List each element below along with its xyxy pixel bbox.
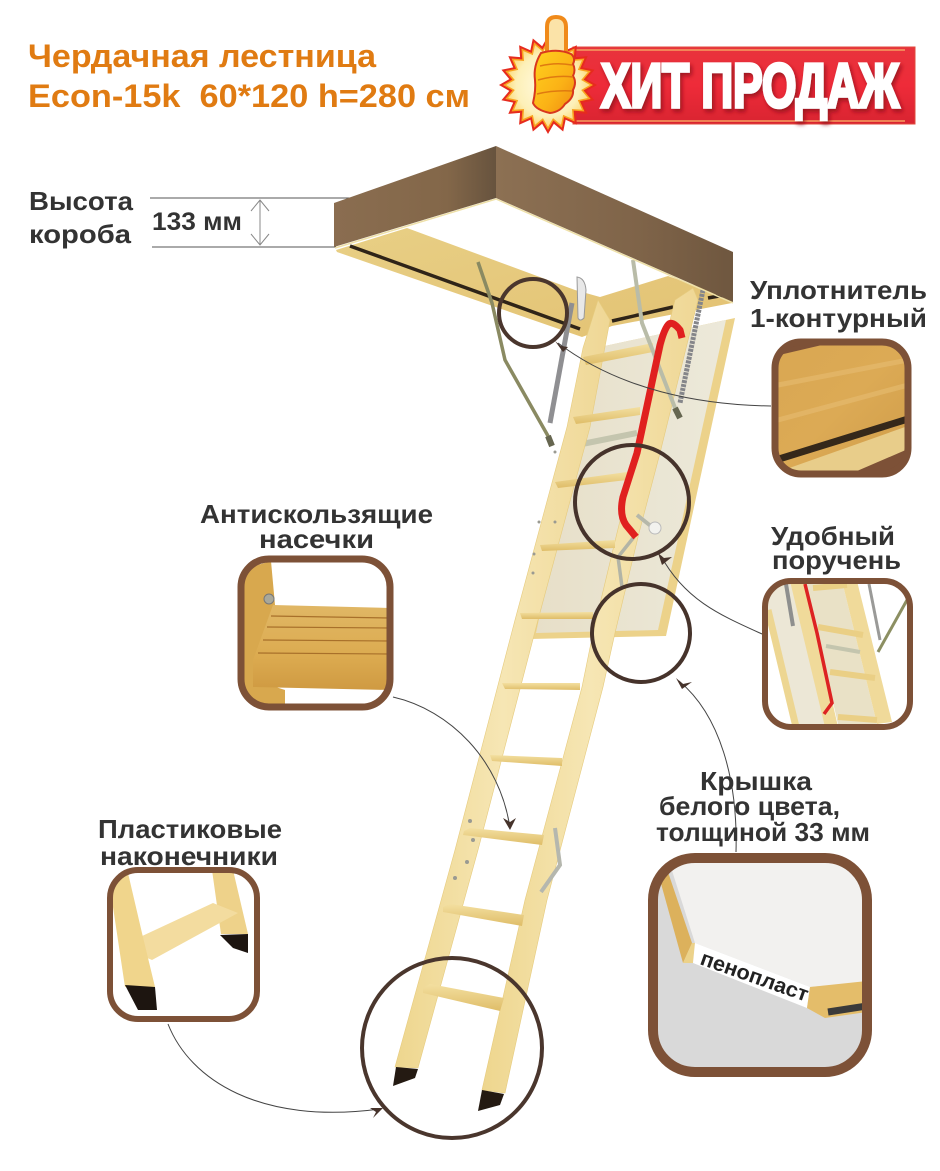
label: handrail: поручень	[772, 545, 901, 575]
circle: tips	[362, 958, 542, 1138]
icon: thumb up	[533, 17, 575, 113]
stile bolts	[453, 450, 556, 880]
panel: plastic tips photo	[110, 870, 257, 1019]
label: lid: белого цвета,	[659, 791, 840, 821]
lid surface	[536, 320, 726, 633]
right stile	[482, 288, 698, 1093]
side hinge	[541, 828, 560, 892]
title	[28, 38, 470, 114]
label: lid	[656, 766, 870, 847]
badge: best seller	[499, 17, 915, 134]
right spring	[680, 290, 703, 403]
box height label: Высота	[29, 186, 134, 216]
panel: lid photo	[653, 858, 867, 1072]
circle: handrail	[575, 445, 689, 559]
lid latch	[637, 515, 661, 534]
label: seal: Уплотнитель	[750, 275, 927, 305]
arrow: lid	[676, 678, 736, 852]
starburst	[499, 36, 597, 134]
title: Чердачная лестница	[28, 38, 376, 74]
foam label: пенопласт	[697, 947, 812, 1006]
lower strap	[618, 537, 634, 587]
panel: handrail photo	[765, 581, 910, 727]
label: anti-slip: насечки	[259, 524, 374, 554]
badge inner stripes	[575, 50, 905, 121]
panel: anti-slip photo	[241, 559, 390, 707]
frame seal	[350, 246, 730, 329]
badge ribbon	[573, 47, 915, 124]
treads	[423, 343, 653, 1011]
wooden frame	[336, 228, 732, 337]
label: seal	[750, 275, 927, 333]
circle: seal	[499, 279, 567, 347]
circle: lid	[592, 584, 690, 682]
label: lid: толщиной 33 мм	[656, 817, 870, 847]
attic box: bottom edge	[335, 199, 733, 303]
strap	[633, 260, 677, 413]
box height label	[29, 186, 134, 249]
label: handrail: Удобный	[771, 521, 895, 551]
main illustration: attic ladder	[334, 146, 735, 1111]
hinge brackets	[548, 408, 680, 446]
label: anti-slip: Антискользящие	[200, 499, 433, 529]
label: anti-slip	[200, 499, 433, 554]
arrow: seal	[555, 341, 771, 406]
red handrail	[622, 323, 682, 537]
arrow: handrail	[658, 553, 762, 634]
mount bracket	[577, 277, 586, 320]
label: plastic tips: Пластиковые	[98, 814, 282, 844]
dimension: 133 mm: 133 мм	[152, 208, 242, 236]
title: Econ-15k 60*120 h=280 см	[28, 78, 470, 114]
label: handrail	[771, 521, 901, 575]
dimension: 133 mm	[150, 198, 353, 247]
left stile	[395, 300, 610, 1068]
lid	[530, 318, 735, 639]
attic box: right face	[496, 146, 733, 302]
label: plastic tips: наконечники	[100, 841, 278, 871]
box height label: короба	[29, 219, 132, 249]
attic box: left face	[334, 146, 496, 247]
label: plastic tips	[98, 814, 282, 871]
crossbar	[577, 433, 637, 445]
plastic tips	[393, 1067, 504, 1111]
panel: seal photo	[775, 342, 908, 474]
label: seal: 1-контурный	[750, 303, 927, 333]
left arm	[478, 262, 552, 443]
arrow: tips	[168, 1024, 383, 1118]
label: lid: Крышка	[700, 766, 813, 796]
arrow: treads	[393, 697, 516, 830]
left spring	[550, 303, 572, 423]
